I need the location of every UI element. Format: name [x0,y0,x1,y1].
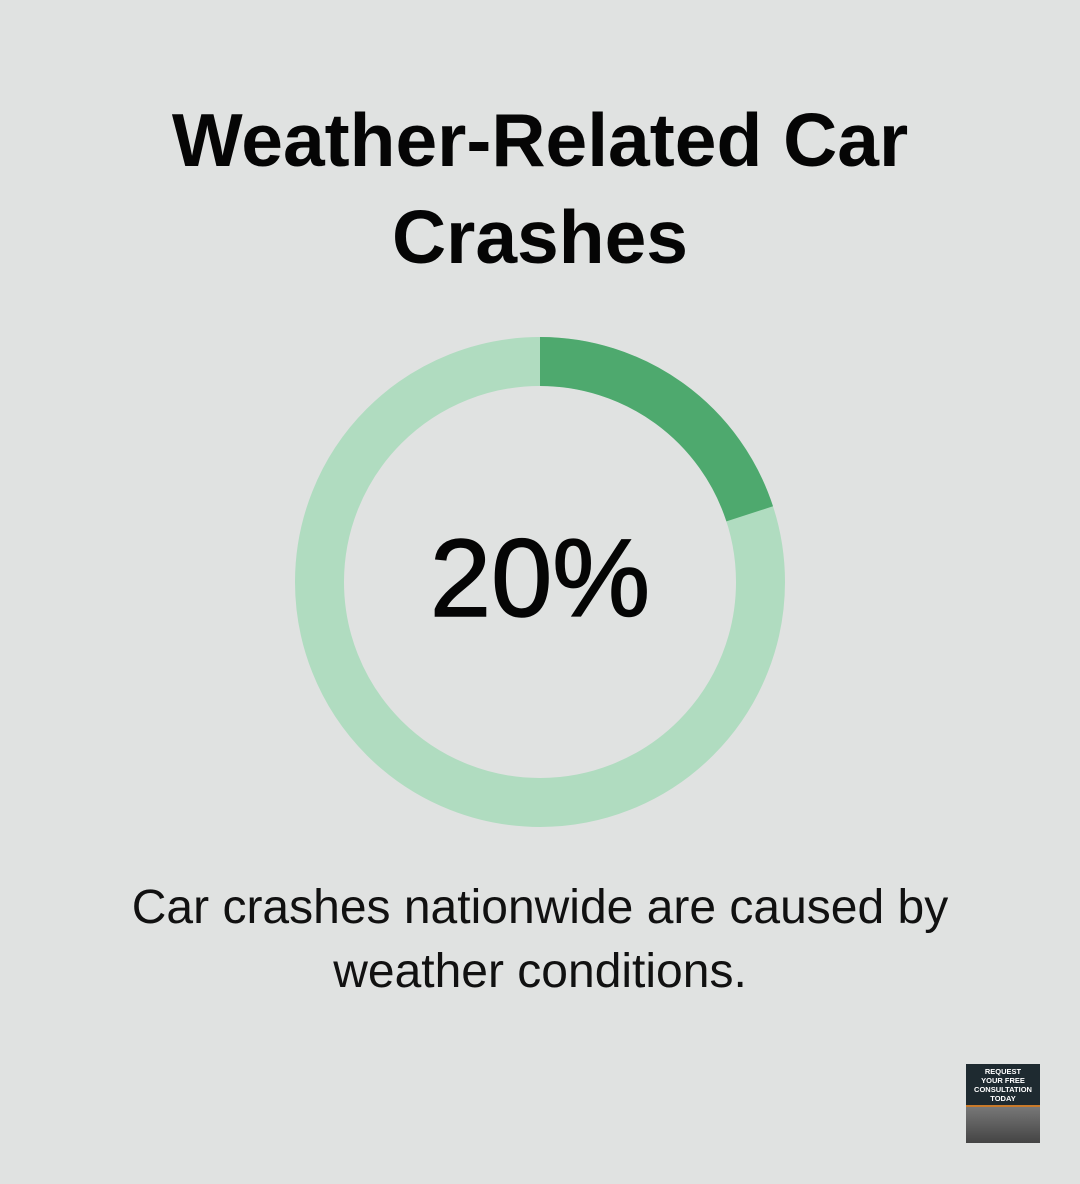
title: Crashes [392,195,688,279]
logo: consultation badge: CONSULTATION [974,1085,1032,1094]
description text: weather conditions. [333,945,747,998]
description text [132,881,948,998]
title: Weather-Related Car [172,98,908,182]
logo: consultation badge: YOUR FREE [981,1076,1025,1085]
description text: Car crashes nationwide are caused by [132,881,948,934]
donut chart: 20% [430,517,650,640]
logo: consultation badge [966,1064,1040,1143]
logo: consultation badge: TODAY [990,1094,1016,1103]
title [172,98,908,279]
logo: consultation badge: REQUEST [985,1067,1021,1076]
